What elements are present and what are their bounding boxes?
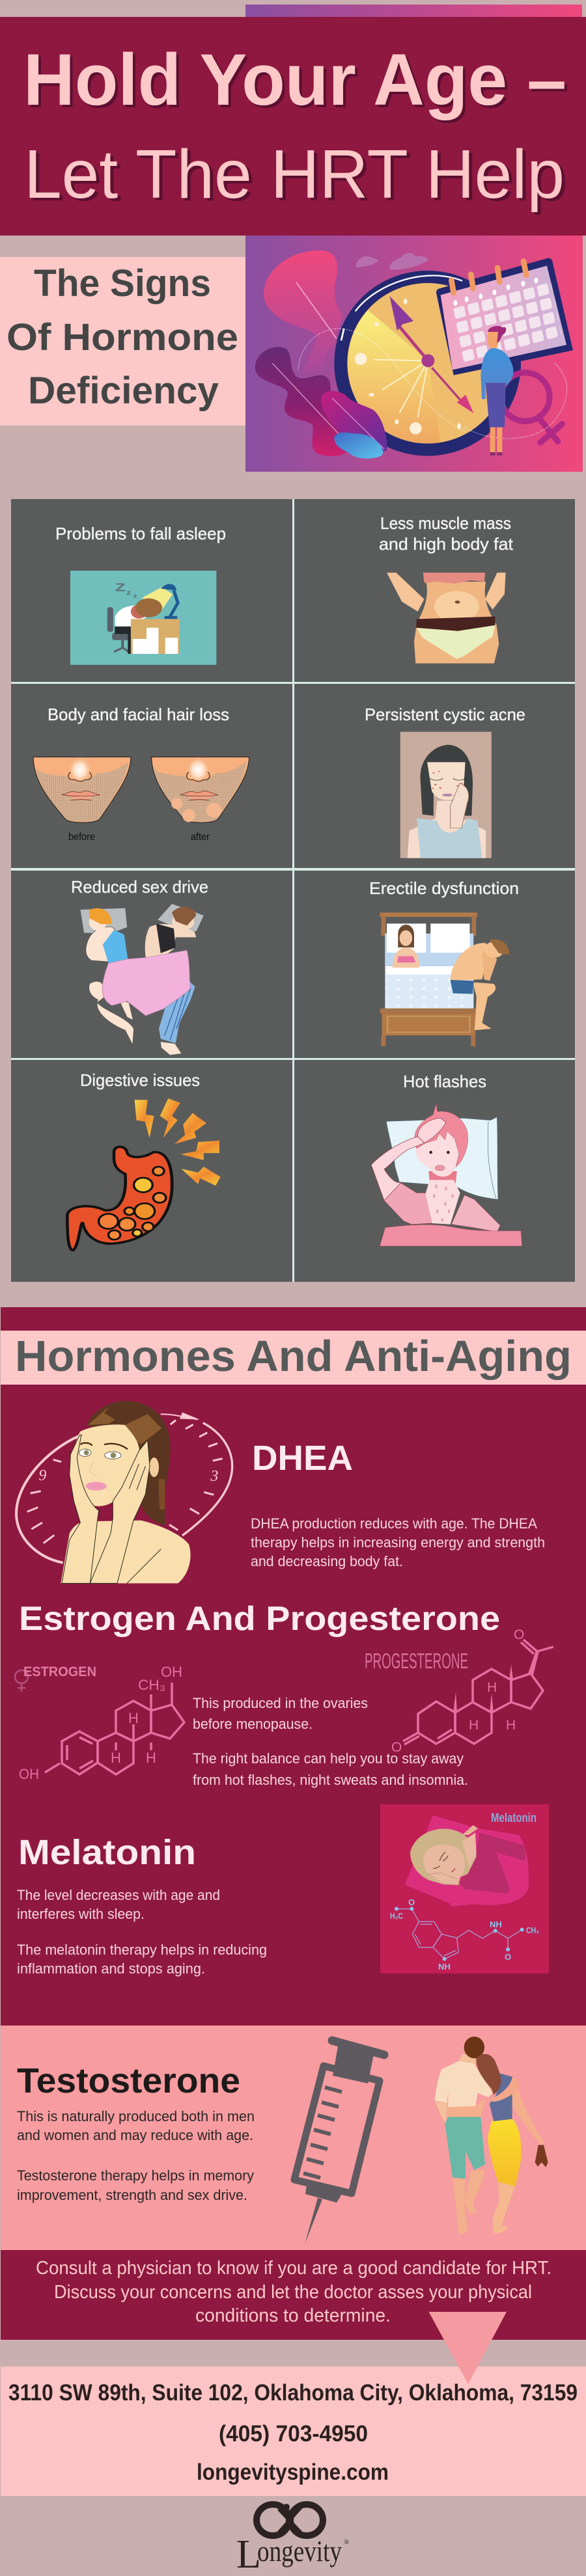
cell: reduced sex drive xyxy=(11,871,292,1058)
panel: signs grid xyxy=(11,499,575,1282)
phone: (405) 703-4950 xyxy=(219,2421,368,2447)
website: longevityspine.com xyxy=(197,2460,389,2485)
icon: couple and bed xyxy=(380,912,509,1046)
label: Body and facial hair loss xyxy=(48,705,229,724)
chart: estrogen molecule: H xyxy=(128,1710,139,1726)
labels: melatonin molecule: H₃C xyxy=(390,1911,403,1921)
panel: signs heading xyxy=(0,257,245,426)
heading band: hormones and anti-aging xyxy=(1,1331,586,1385)
title line one: Hold Your Age – xyxy=(23,39,566,120)
chart: progesterone molecule: O xyxy=(391,1740,402,1755)
text block: melatonin: The melatonin therapy helps in reducing xyxy=(17,1942,267,1958)
labels: melatonin molecule: NH xyxy=(438,1962,451,1972)
logo wordmark initial: L xyxy=(236,2532,261,2576)
text block: estrogen and progesterone: The right balance can help you to stay away xyxy=(193,1750,464,1767)
chart: estrogen molecule xyxy=(19,1664,184,1782)
cell: cystic acne xyxy=(294,684,575,868)
text block: testosterone: improvement, strength and sex drive. xyxy=(17,2187,247,2203)
illustration: clock, calendar and woman xyxy=(245,236,583,472)
cell: problems to fall asleep xyxy=(11,499,292,682)
callout line three: conditions to determine. xyxy=(195,2305,391,2326)
icon: man asleep at desk: Z xyxy=(115,581,126,593)
label: progesterone: PROGESTERONE xyxy=(365,1649,468,1673)
icon: syringe xyxy=(294,2040,384,2244)
icon: man asleep at desk: z xyxy=(133,593,137,599)
logo: longevity xyxy=(236,2504,349,2576)
icon: man asleep at desk: z xyxy=(126,589,131,596)
section: testosterone background xyxy=(1,2026,586,2250)
cell: hair loss xyxy=(11,684,292,868)
text block: DHEA xyxy=(251,1515,545,1569)
icon: woman sweating in bed xyxy=(371,1104,522,1246)
heading: estrogen and progesterone: Estrogen And Progesterone xyxy=(19,1600,500,1638)
heading text: Hormones And Anti-Aging xyxy=(15,1332,572,1381)
chart: progesterone molecule: H xyxy=(487,1680,497,1695)
logo wordmark: ongevity xyxy=(257,2534,342,2568)
illustration: woman and clock xyxy=(16,1401,232,1583)
text block: DHEA: and decreasing body fat. xyxy=(251,1553,403,1569)
cell: less muscle mass xyxy=(294,499,575,682)
labels: melatonin molecule: NH xyxy=(490,1919,502,1929)
text block: estrogen and progesterone: before menopause. xyxy=(193,1716,313,1732)
text block: melatonin: inflammation and stops aging. xyxy=(17,1960,205,1977)
text block: testosterone: Testosterone therapy helps in memory xyxy=(17,2167,254,2184)
caption: before: before xyxy=(68,832,95,843)
panel: consult callout xyxy=(1,2250,586,2340)
label: Problems to fall asleep xyxy=(55,524,226,543)
cell: erectile dysfunction xyxy=(294,871,575,1058)
label: Reduced sex drive xyxy=(71,877,208,897)
label: Digestive issues xyxy=(80,1070,200,1090)
panel: contact details xyxy=(1,2366,586,2496)
text block: DHEA: therapy helps in increasing energy and strength xyxy=(251,1534,545,1551)
icon: belly fat xyxy=(387,573,506,663)
text block: melatonin: interferes with sleep. xyxy=(17,1906,145,1922)
heading: deficiency: Deficiency xyxy=(28,370,219,412)
icon: woman with acne xyxy=(400,732,492,858)
label: melatonin caption: Melatonin xyxy=(491,1811,537,1825)
labels: melatonin molecule: O xyxy=(505,1952,511,1962)
callout line two: Discuss your concerns and let the doctor asses your physical xyxy=(54,2282,532,2303)
text block: melatonin xyxy=(17,1887,267,1977)
label line one: Less muscle mass xyxy=(380,513,511,533)
chart: estrogen molecule: OH xyxy=(161,1664,182,1680)
chart: progesterone molecule xyxy=(391,1627,553,1755)
icon: man asleep at desk xyxy=(70,571,216,665)
text block: testosterone xyxy=(17,2108,255,2203)
labels: melatonin molecule: O xyxy=(408,1897,415,1907)
icon: inflamed stomach xyxy=(67,1098,221,1251)
illustration: melatonin sleeper and molecule xyxy=(380,1804,549,1973)
heading: the signs: The Signs xyxy=(34,262,211,305)
arrow: pink triangle xyxy=(428,2312,507,2384)
label: Erectile dysfunction xyxy=(369,878,519,898)
chart: estrogen molecule: H xyxy=(146,1750,156,1766)
label: estrogen: ESTROGEN xyxy=(23,1664,96,1679)
label: Hot flashes xyxy=(403,1072,486,1091)
registered mark: ® xyxy=(344,2538,349,2546)
callout line one: Consult a physician to know if you are a good candidate for HRT. xyxy=(36,2258,551,2279)
illustration: woman and clock: 9 xyxy=(38,1467,46,1484)
text block: estrogen and progesterone xyxy=(193,1695,468,1788)
heading: melatonin: Melatonin xyxy=(18,1833,196,1872)
heading: DHEA: DHEA xyxy=(252,1439,353,1478)
chart: estrogen molecule: OH xyxy=(19,1766,39,1782)
chart: progesterone molecule: O xyxy=(514,1627,524,1642)
text block: testosterone: This is naturally produced both in men xyxy=(17,2108,255,2124)
icon: couple turned away in bed xyxy=(80,904,204,1055)
caption: after: after xyxy=(191,832,210,843)
gradient accent bar xyxy=(245,5,582,17)
section: hormones and anti-aging background xyxy=(1,1307,586,2026)
icon: after face xyxy=(152,757,249,822)
illustration: woman and clock: 3 xyxy=(210,1468,218,1485)
text block: testosterone: and women and may reduce with age. xyxy=(17,2127,253,2143)
chart: progesterone molecule: H xyxy=(469,1718,479,1733)
icon: before face xyxy=(33,757,131,822)
cell: digestive issues xyxy=(11,1060,292,1282)
label line two: and high body fat xyxy=(379,534,514,554)
heading: testosterone: Testosterone xyxy=(17,2061,240,2100)
title line two: Let The HRT Help xyxy=(24,136,565,213)
chart: estrogen molecule: CH₃ xyxy=(138,1677,165,1693)
label: Persistent cystic acne xyxy=(365,705,525,724)
text block: estrogen and progesterone: This produced in the ovaries xyxy=(193,1695,368,1711)
text block: DHEA: DHEA production reduces with age. The DHEA xyxy=(251,1515,537,1532)
text block: melatonin: The level decreases with age and xyxy=(17,1887,220,1903)
illustration: couple walking xyxy=(434,2037,548,2235)
chart: progesterone molecule: H xyxy=(506,1718,516,1733)
heading: of hormone: Of Hormone xyxy=(7,316,238,359)
text block: estrogen and progesterone: from hot flashes, night sweats and insomnia. xyxy=(193,1772,468,1788)
labels: melatonin molecule xyxy=(390,1897,539,1972)
labels: melatonin molecule: CH₃ xyxy=(526,1925,539,1935)
cell: hot flashes xyxy=(294,1060,575,1282)
icon: female symbol xyxy=(15,1670,28,1692)
chart: estrogen molecule: H xyxy=(111,1750,121,1766)
title banner xyxy=(0,17,586,236)
